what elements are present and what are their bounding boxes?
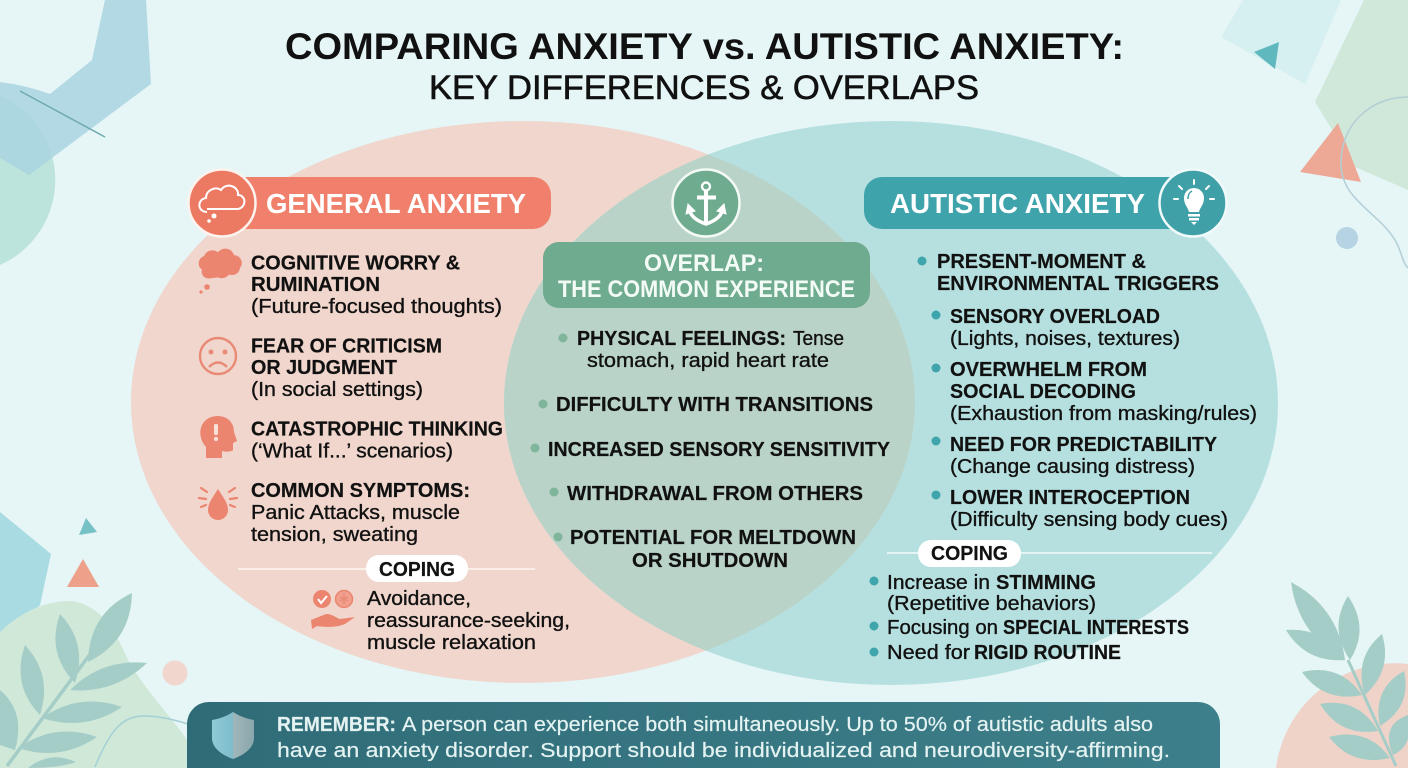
coping: autistic anxiety: STIMMING xyxy=(996,572,1096,594)
item: catastrophic thinking: CATASTROPHIC THINKING xyxy=(251,418,503,440)
overlap list: stomach, rapid heart rate xyxy=(587,350,829,372)
item: common symptoms xyxy=(199,480,470,546)
item: common symptoms: tension, sweating xyxy=(251,524,418,546)
remember text: have an anxiety disorder. Support should be individualized and neurodiversity-affirming. xyxy=(277,740,1170,762)
overlap list: DIFFICULTY WITH TRANSITIONS xyxy=(556,394,873,416)
panel: general anxiety xyxy=(188,170,570,654)
header: overlap: OVERLAP: xyxy=(644,250,764,277)
overlap list: OR SHUTDOWN xyxy=(632,550,788,572)
item: fear of criticism: OR JUDGMENT xyxy=(251,357,397,379)
icon: anchor xyxy=(672,170,740,236)
autistic anxiety list: ENVIRONMENTAL TRIGGERS xyxy=(937,273,1219,295)
header: overlap xyxy=(543,242,870,308)
item: common symptoms: COMMON SYMPTOMS: xyxy=(251,480,470,502)
autistic anxiety list: (Exhaustion from masking/rules) xyxy=(950,403,1257,425)
overlap list: Tense xyxy=(793,328,844,350)
decoration: bottom-left shapes and leaves xyxy=(0,512,188,768)
autistic anxiety list: NEED FOR PREDICTABILITY xyxy=(950,434,1218,456)
header: general anxiety: GENERAL ANXIETY xyxy=(266,188,526,219)
autistic anxiety list: OVERWHELM FROM xyxy=(950,359,1147,381)
coping: general anxiety: reassurance-seeking, xyxy=(367,610,570,632)
item: cognitive worry xyxy=(199,249,502,318)
coping: general anxiety: muscle relaxation xyxy=(367,632,536,654)
coping: autistic anxiety: RIGID ROUTINE xyxy=(974,642,1121,664)
remember text xyxy=(277,714,1170,762)
header: general anxiety xyxy=(188,170,551,236)
autistic anxiety list: (Lights, noises, textures) xyxy=(950,328,1180,350)
decoration: top-left shapes xyxy=(0,0,151,265)
item: catastrophic thinking: (‘What If...’ scenarios) xyxy=(251,440,453,462)
coping: general anxiety xyxy=(238,555,570,654)
callout: remember banner xyxy=(187,702,1220,768)
coping: autistic anxiety xyxy=(870,540,1212,664)
item: fear of criticism: (In social settings) xyxy=(251,379,423,401)
item: catastrophic thinking xyxy=(200,416,503,462)
icon: shield xyxy=(212,712,254,759)
header: autistic anxiety: AUTISTIC ANXIETY xyxy=(890,188,1145,219)
coping: autistic anxiety: Need for xyxy=(887,642,970,664)
autistic anxiety list: (Change causing distress) xyxy=(950,456,1195,478)
coping: autistic anxiety: (Repetitive behaviors) xyxy=(887,593,1096,615)
coping: autistic anxiety: Increase in xyxy=(887,572,990,594)
coping: autistic anxiety: SPECIAL INTERESTS xyxy=(1003,617,1189,639)
autistic anxiety list: (Difficulty sensing body cues) xyxy=(950,509,1228,531)
autistic anxiety list: LOWER INTEROCEPTION xyxy=(950,487,1190,509)
title xyxy=(285,26,1124,107)
panel: overlap xyxy=(530,170,891,572)
coping: autistic anxiety: COPING xyxy=(931,543,1008,565)
decoration: bottom-right shapes and leaves xyxy=(1276,582,1408,768)
decoration: top-right shapes xyxy=(1221,0,1408,268)
coping: autistic anxiety: Focusing on xyxy=(887,617,998,639)
coping: general anxiety: COPING xyxy=(379,559,455,581)
item: fear of criticism: FEAR OF CRITICISM xyxy=(251,336,442,358)
item: cognitive worry: (Future-focused thoughts) xyxy=(251,296,502,318)
header: overlap: THE COMMON EXPERIENCE xyxy=(558,276,855,303)
title: COMPARING ANXIETY vs. AUTISTIC ANXIETY: xyxy=(285,26,1124,67)
item: common symptoms: Panic Attacks, muscle xyxy=(251,502,460,524)
item: cognitive worry: RUMINATION xyxy=(251,274,380,296)
overlap list: WITHDRAWAL FROM OTHERS xyxy=(567,483,863,505)
overlap list: POTENTIAL FOR MELTDOWN xyxy=(570,527,856,549)
remember text: A person can experience both simultaneously. Up to 50% of autistic adults also xyxy=(402,714,1153,736)
autistic anxiety list: SOCIAL DECODING xyxy=(950,381,1136,403)
autistic anxiety list xyxy=(918,251,1257,531)
autistic anxiety list: SENSORY OVERLOAD xyxy=(950,306,1160,328)
coping: general anxiety: Avoidance, xyxy=(367,588,471,610)
item: fear of criticism xyxy=(200,336,442,401)
overlap list xyxy=(530,328,891,572)
title: KEY DIFFERENCES & OVERLAPS xyxy=(429,69,979,107)
autistic anxiety list: PRESENT-MOMENT & xyxy=(937,251,1146,273)
item: cognitive worry: COGNITIVE WORRY & xyxy=(251,252,460,274)
overlap list: INCREASED SENSORY SENSITIVITY xyxy=(548,439,891,461)
overlap list: PHYSICAL FEELINGS: xyxy=(577,328,786,350)
header: autistic anxiety xyxy=(864,170,1226,236)
venn diagram circles xyxy=(131,121,1278,685)
remember text: REMEMBER: xyxy=(277,714,396,736)
panel: autistic anxiety xyxy=(864,170,1257,664)
